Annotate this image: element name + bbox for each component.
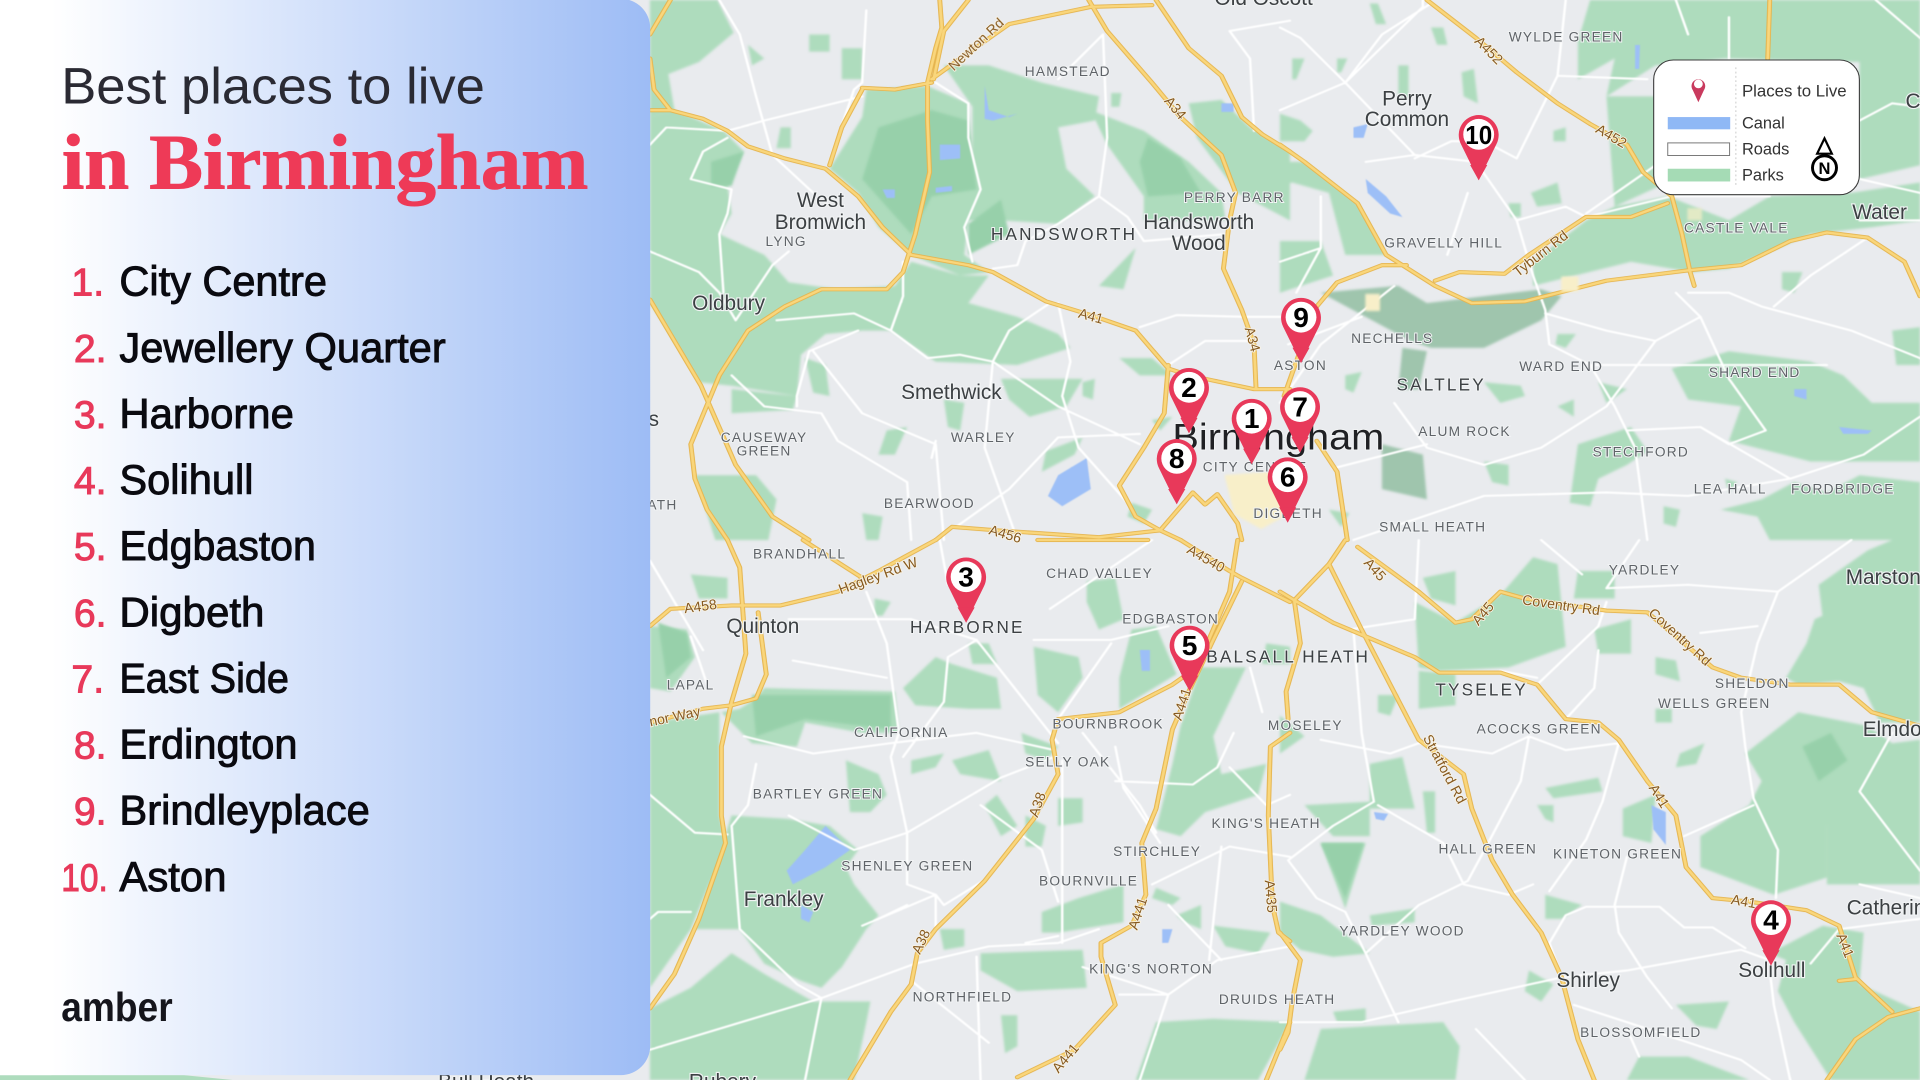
legend swatch: canal [1668, 117, 1730, 129]
map pin 6 [1268, 457, 1308, 523]
map: district labels: BOURNVILLE [1039, 873, 1138, 888]
map: district labels: EDGBASTON [1122, 611, 1219, 626]
map: district labels: STECHFORD [1593, 445, 1689, 460]
map: district labels: NECHELLS [1351, 331, 1433, 346]
map: town labels: Quinton [726, 615, 799, 638]
list item 8: 8. [74, 725, 107, 768]
map: major roads [650, 0, 1920, 1080]
list item 6: 6. [74, 592, 107, 635]
map: district labels: GREEN [737, 444, 792, 459]
map pin 4: 4 [1763, 904, 1779, 935]
map pin 9 [1281, 298, 1321, 363]
map: district labels [647, 30, 1895, 1040]
map: district labels: SHENLEY GREEN [841, 859, 973, 874]
legend panel [1654, 60, 1859, 195]
map: district labels: SMALL HEATH [1379, 519, 1486, 534]
map: district labels: BALSALL HEATH [1206, 646, 1370, 666]
icon: north arrow [1812, 138, 1836, 180]
map: district labels: CASTLE VALE [1684, 221, 1789, 236]
map pin 7 [1280, 387, 1320, 452]
list item 3: Harborne [119, 390, 294, 437]
list item 7: East Side [119, 654, 289, 701]
map: district labels: HAMSTEAD [1025, 64, 1111, 79]
map: district labels: WARD END [1519, 359, 1603, 374]
bottom map strip below panel [0, 1075, 233, 1080]
legend swatch: parks [1668, 169, 1730, 181]
legend label: canal: Canal [1742, 115, 1785, 133]
list item 10: 10. [61, 857, 108, 900]
map pin 3: 3 [958, 562, 974, 593]
title line 2: in Birmingham [62, 119, 588, 206]
list item 10 [61, 853, 227, 900]
map: road labels: A452 [1593, 121, 1630, 151]
map: district labels: ALUM ROCK [1418, 424, 1511, 439]
map: district labels: LEA HALL [1694, 481, 1767, 496]
map: road labels: A41 [1730, 891, 1758, 911]
map pin 8: 8 [1169, 443, 1185, 474]
map: town labels: Common [1365, 108, 1449, 131]
left panel white edge [0, 0, 51, 1075]
map: road labels: Tyburn Rd [1510, 227, 1571, 280]
list item 2: Jewellery Quarter [119, 324, 446, 371]
map: parks [650, 0, 1920, 1080]
map: road labels: A38 [908, 927, 933, 956]
map pin 6: 6 [1280, 461, 1296, 492]
map: district labels: GRAVELLY HILL [1384, 235, 1503, 250]
map: town labels: Handsworth [1143, 211, 1254, 234]
map: road labels: A41 [1646, 781, 1673, 811]
map: town labels: Shirley [1556, 969, 1621, 992]
map: district labels: DIGBETH [1253, 506, 1323, 521]
map: road labels: A34 [1161, 93, 1190, 123]
map: road labels: A34 [1242, 325, 1264, 353]
legend label: places to live: Places to Live [1742, 83, 1847, 101]
map: district labels: CALIFORNIA [854, 725, 948, 740]
map: town labels: Water [1852, 201, 1907, 224]
map: district labels: YARDLEY WOOD [1339, 924, 1465, 939]
map: district labels: MOSELEY [1268, 718, 1343, 733]
map pin 5: 5 [1182, 630, 1197, 661]
map: road labels: A441 [1049, 1040, 1082, 1076]
legend label: parks: Parks [1742, 167, 1784, 185]
legend label: roads: Roads [1742, 140, 1789, 158]
map: road labels: Coventry Rd [1646, 605, 1714, 669]
map: district labels: WARLEY [951, 430, 1016, 445]
map: town labels: West [797, 189, 844, 212]
map pin 7: 7 [1292, 391, 1308, 422]
map: road labels: A458 [683, 596, 718, 616]
map: town labels: Bromwich [775, 211, 866, 234]
map: road labels: A452 [1472, 33, 1506, 68]
map: district labels: ASTON [1274, 358, 1327, 373]
map: district labels: CHAD VALLEY [1046, 566, 1153, 581]
map: district labels: BARTLEY GREEN [753, 786, 883, 801]
map: district labels: HALL GREEN [1438, 841, 1537, 856]
logo: amber: amber [61, 984, 173, 1030]
map: water [787, 45, 1872, 943]
title line 1: Best places to live [61, 56, 485, 114]
map pin 1: 1 [1244, 403, 1260, 434]
map: district labels: ACOCKS GREEN [1477, 721, 1602, 736]
map: town labels: Smethwick [901, 381, 1002, 404]
list item 4: Solihull [119, 456, 253, 503]
ranked list of places [61, 258, 446, 900]
map: district labels: TYSELEY [1435, 680, 1528, 700]
map: district labels: NORTHFIELD [913, 990, 1012, 1005]
map pin 10: 10 [1465, 122, 1492, 150]
map: city centre and town highlights [1224, 208, 1702, 529]
map pin 3 [946, 557, 986, 623]
list item 1: City Centre [119, 258, 327, 305]
list item 9: 9. [74, 791, 107, 834]
map: road labels: A441 [1125, 895, 1150, 932]
map pin 5 [1170, 626, 1210, 691]
map: district labels: LAPAL [667, 677, 715, 692]
map: town labels: Perry [1382, 87, 1432, 110]
map: road labels: A41 [1833, 931, 1858, 960]
map: district labels: BOURNBROOK [1053, 717, 1164, 732]
map: district labels: KINETON GREEN [1553, 846, 1682, 861]
map: road labels: A4540 [1185, 541, 1228, 575]
map pin 9: 9 [1293, 302, 1309, 333]
map: road labels: A38 [1025, 790, 1049, 819]
map pin 8 [1157, 439, 1197, 504]
map: major roads centre line [650, 0, 1920, 1080]
list item 5: Edgbaston [119, 522, 316, 569]
map: district labels: WELLS GREEN [1658, 696, 1771, 711]
map: district labels: HANDSWORTH [991, 224, 1137, 244]
map: town labels: Marston [1846, 566, 1920, 589]
map: road labels: A456 [987, 522, 1024, 546]
map: district labels: LYNG [766, 234, 807, 249]
map pin 4 [1751, 900, 1791, 966]
map: district labels: BEARWOOD [884, 496, 975, 511]
map pin 10 [1459, 115, 1499, 180]
map: district labels: BLOSSOMFIELD [1580, 1025, 1701, 1040]
map: road labels: A41 [1077, 305, 1105, 327]
map: district labels: BRANDHALL [753, 546, 846, 561]
legend icon: place pin [1692, 79, 1705, 102]
map: district labels: FORDBRIDGE [1791, 481, 1895, 496]
map: district labels: CAUSEWAY [721, 430, 807, 445]
map: road labels: A441 [1169, 686, 1194, 722]
map: district labels: HARBORNE [910, 617, 1025, 637]
map: district labels: SELLY OAK [1025, 755, 1110, 770]
map: road labels: A45 [1361, 555, 1390, 584]
map: district labels: YARDLEY [1609, 562, 1680, 577]
map: district labels: SALTLEY [1397, 375, 1486, 395]
map pin 2: 2 [1181, 372, 1197, 403]
map: road labels [648, 14, 1858, 1076]
list item 3: 3. [74, 394, 107, 437]
list item 1: 1. [71, 262, 104, 305]
map: road labels: Stratford Rd [1420, 732, 1470, 806]
map: district labels: SHARD END [1709, 365, 1801, 380]
list item 8: Erdington [119, 721, 298, 768]
list item 4: 4. [74, 460, 107, 503]
map: road labels: Hagley Rd W [836, 553, 920, 597]
map pin 1 [1232, 399, 1272, 464]
map: district labels: KING'S NORTON [1089, 961, 1213, 976]
map: road labels: Coventry Rd [1521, 591, 1601, 618]
map: minor roads [650, 0, 1920, 1080]
map: road labels: A45 [1469, 599, 1497, 628]
map: district labels: CITY CENTRE [1203, 459, 1307, 474]
list item 7: 7. [71, 658, 104, 701]
map: road labels: nor Way [648, 703, 703, 729]
map pin 2 [1169, 368, 1209, 433]
map: town labels: Wood [1172, 232, 1226, 255]
map: district labels: WYLDE GREEN [1509, 30, 1623, 45]
map: town labels [438, 0, 1920, 1080]
list item 2: 2. [74, 328, 107, 371]
map: town labels: Solihull [1738, 959, 1805, 982]
left panel: gradient background [0, 0, 650, 1075]
map: town labels: Oldbury [692, 292, 766, 315]
map: district labels: STIRCHLEY [1113, 844, 1201, 859]
map: darker wooded and industrial areas [658, 110, 1847, 898]
map: district labels: ATH [647, 497, 677, 512]
icon: north arrow: N [1819, 159, 1830, 178]
map: town labels: s [649, 408, 659, 431]
map: town labels: Birmingham [1172, 416, 1384, 457]
list item 9: Brindleyplace [119, 787, 370, 834]
list item 10: Aston [119, 853, 227, 900]
map: district labels: KING'S HEATH [1212, 816, 1321, 831]
map: district labels: PERRY BARR [1184, 190, 1285, 205]
map: road labels: Newton Rd [945, 14, 1007, 74]
list item 6: Digbeth [119, 588, 264, 635]
map: road labels: A435 [1262, 879, 1281, 914]
map: district labels: DRUIDS HEATH [1219, 992, 1335, 1007]
legend swatch: roads [1668, 143, 1730, 156]
map: district labels: SHELDON [1715, 676, 1790, 691]
map: town labels: Frankley [744, 888, 824, 911]
list item 5: 5. [74, 526, 107, 569]
